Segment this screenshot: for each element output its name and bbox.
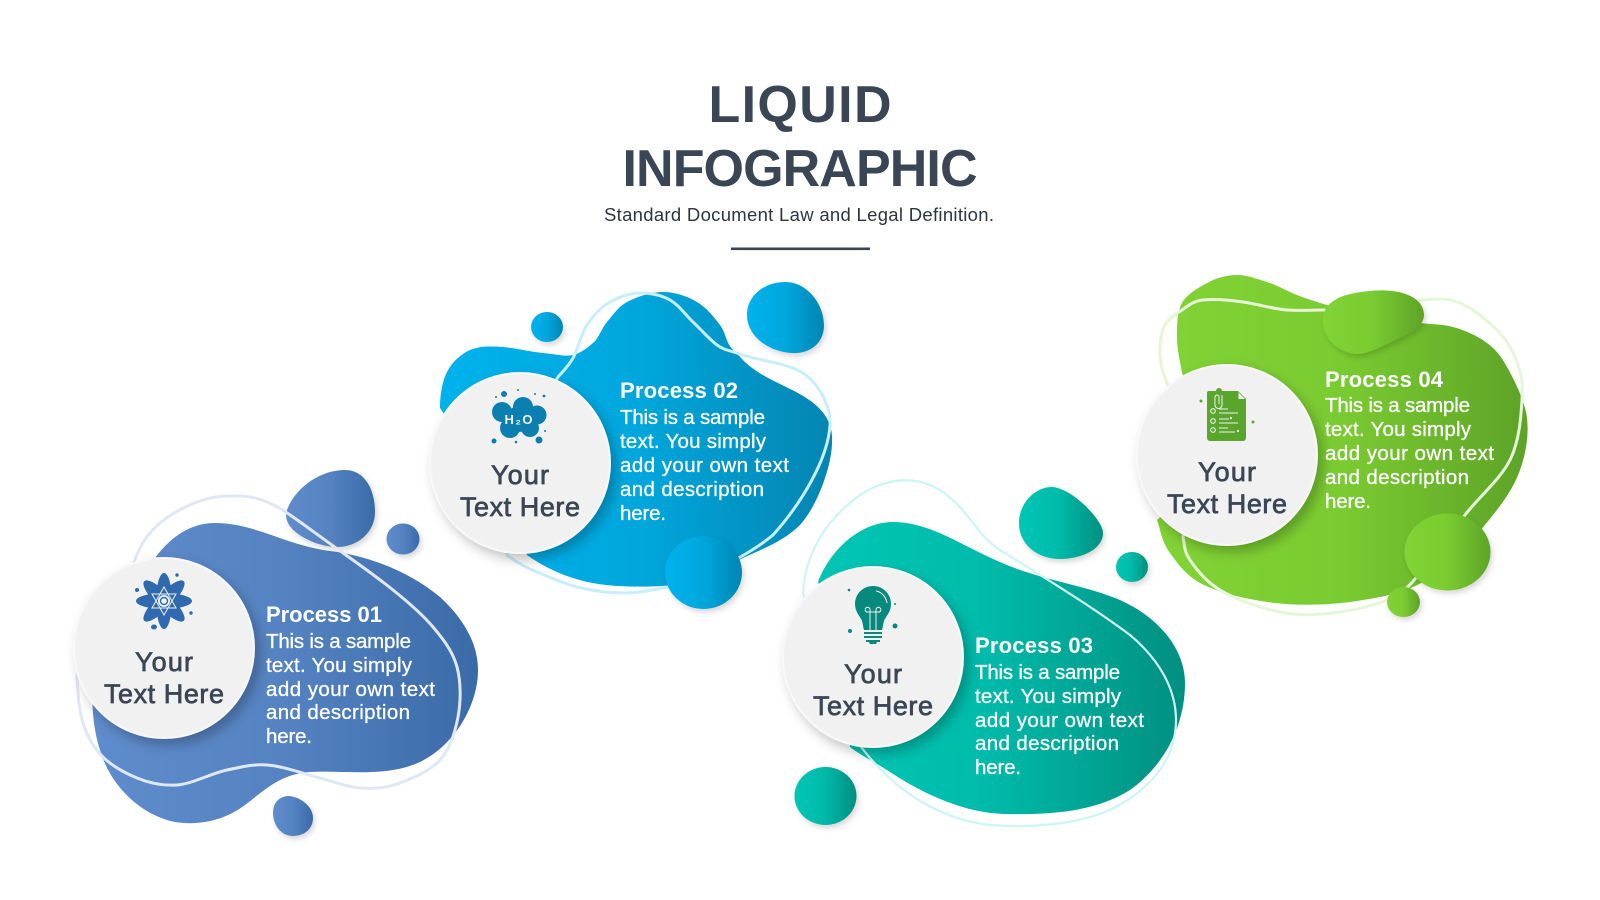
text block 02: text. You simply bbox=[620, 430, 767, 453]
text block 03: Process 03 bbox=[975, 633, 1093, 658]
badge label 03 bbox=[813, 659, 933, 721]
badge label 02: Text Here bbox=[460, 492, 580, 522]
text block 02: and description bbox=[620, 478, 764, 501]
title underline bbox=[731, 248, 870, 250]
droplet small 01 bbox=[386, 524, 420, 554]
droplet small 02 bbox=[531, 312, 563, 342]
text block 02: add your own text bbox=[620, 454, 789, 477]
text block 02: here. bbox=[620, 502, 666, 525]
droplet large 02 bbox=[747, 282, 824, 353]
text block 03: text. You simply bbox=[975, 685, 1122, 708]
droplet bottom 02 bbox=[665, 536, 742, 609]
panel: process 02 bbox=[430, 282, 832, 609]
badge label 02 bbox=[460, 460, 580, 522]
text block 04: This is a sample bbox=[1325, 394, 1470, 417]
badge label 04 bbox=[1167, 457, 1287, 519]
badge label 01: Text Here bbox=[104, 679, 224, 709]
text block 04: Process 04 bbox=[1325, 367, 1444, 392]
icon: document bbox=[1200, 388, 1254, 441]
circle badge 03 bbox=[783, 567, 963, 747]
text block 01: This is a sample bbox=[266, 630, 411, 653]
droplet large 01 bbox=[286, 470, 375, 547]
liquid blob 04 bbox=[1157, 275, 1528, 605]
text block 02: Process 02 bbox=[620, 378, 738, 403]
badge label 03: Your bbox=[844, 659, 902, 689]
icon: H2O cloud bbox=[492, 389, 546, 444]
subtitle: Standard Document Law and Legal Definition. bbox=[604, 204, 994, 225]
panel: process 01 bbox=[74, 470, 478, 836]
droplet bottom 03 bbox=[794, 767, 856, 825]
badge label 04: Text Here bbox=[1167, 489, 1287, 519]
icon: light bulb bbox=[848, 586, 898, 644]
text block 03: This is a sample bbox=[975, 661, 1120, 684]
text block 01: text. You simply bbox=[266, 654, 413, 677]
text block 04: text. You simply bbox=[1325, 418, 1472, 441]
text block 03 bbox=[975, 633, 1144, 779]
droplet bottom 01 bbox=[273, 796, 313, 836]
circle badge 04 bbox=[1137, 365, 1317, 545]
text block 01: and description bbox=[266, 701, 410, 724]
droplet large 04 bbox=[1323, 290, 1424, 354]
text block 03: add your own text bbox=[975, 709, 1144, 732]
droplet large 03 bbox=[1019, 487, 1103, 559]
title: LIQUID bbox=[708, 76, 892, 134]
text block 04: here. bbox=[1325, 490, 1371, 513]
icon: atom bbox=[135, 573, 193, 630]
liquid blob 03 bbox=[818, 522, 1185, 814]
text block 04 bbox=[1325, 367, 1494, 513]
droplet right 04 bbox=[1404, 514, 1490, 590]
liquid blob 01 bbox=[92, 523, 478, 823]
outline ring 03 bbox=[803, 480, 1176, 826]
circle badge 01 bbox=[74, 558, 254, 738]
outline ring 01 bbox=[77, 496, 460, 788]
text block 01: add your own text bbox=[266, 678, 435, 701]
circle badge 02 bbox=[430, 373, 610, 553]
text block 04: and description bbox=[1325, 466, 1469, 489]
droplet small 04 bbox=[1387, 587, 1420, 617]
badge label 04: Your bbox=[1198, 457, 1256, 487]
badge label 01: Your bbox=[135, 647, 193, 677]
droplet small 03 bbox=[1116, 552, 1148, 582]
badge label 02: Your bbox=[491, 460, 549, 490]
text block 02: This is a sample bbox=[620, 406, 765, 429]
outline ring 04 bbox=[1160, 299, 1522, 615]
text block 01: Process 01 bbox=[266, 602, 382, 627]
text block 01: here. bbox=[266, 725, 312, 748]
badge label 03: Text Here bbox=[813, 691, 933, 721]
badge label 01 bbox=[104, 647, 224, 709]
panel: process 03 bbox=[783, 480, 1185, 826]
title bbox=[622, 76, 978, 198]
panel: process 04 bbox=[1137, 275, 1528, 617]
icon: H2O cloud: H₂O bbox=[504, 412, 532, 427]
text block 03: and description bbox=[975, 732, 1119, 755]
liquid blob 02 bbox=[440, 292, 832, 587]
text block 04: add your own text bbox=[1325, 442, 1494, 465]
text block 01 bbox=[266, 602, 435, 748]
outline ring 02 bbox=[507, 293, 830, 593]
text block 02 bbox=[620, 378, 789, 525]
text block 03: here. bbox=[975, 756, 1021, 779]
title: INFOGRAPHIC bbox=[622, 140, 978, 198]
